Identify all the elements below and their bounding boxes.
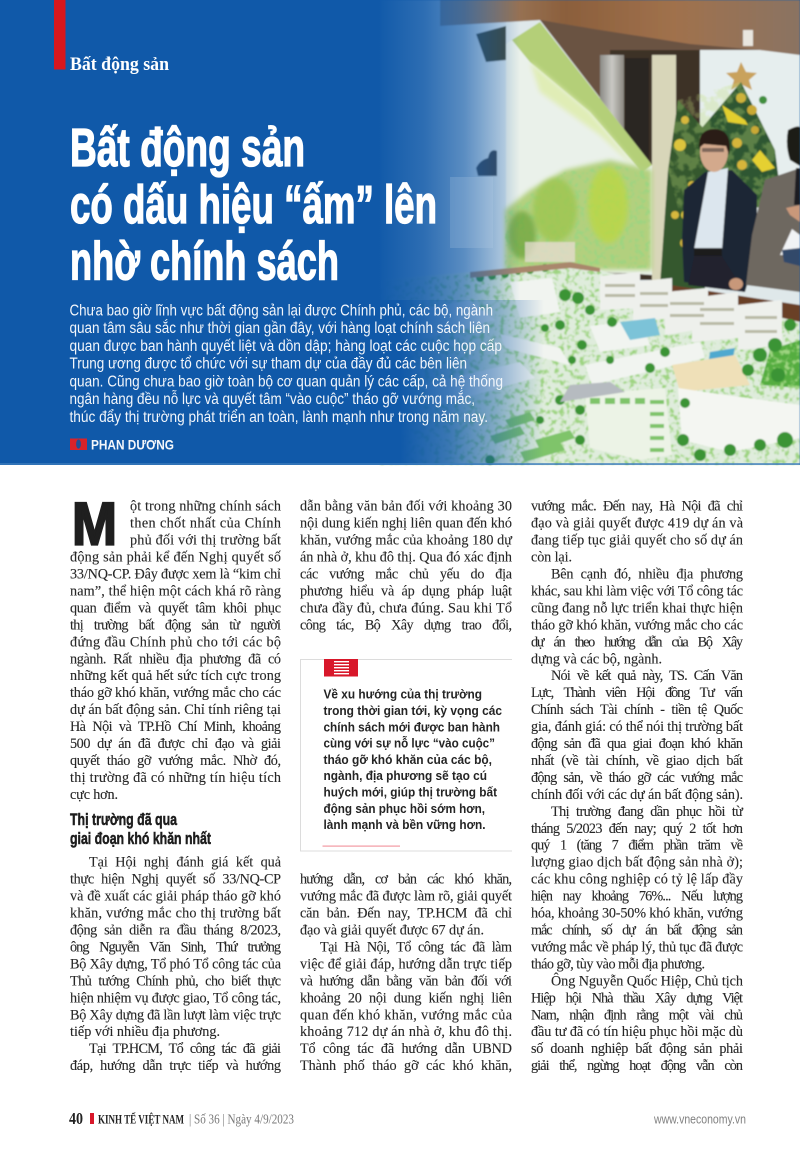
column 3 text: khác, sau khi làm việc với Tổ công tác (531, 584, 743, 600)
column 3 text: đầu tư đã có tín hiệu phục hồi mặc dù (531, 1024, 743, 1040)
subheading: Thị trường đã qua (70, 810, 177, 829)
quote text: cùng với sự nỗ lực “vào cuộc” (324, 736, 495, 751)
box border (300, 660, 512, 851)
column 1 second section text: Thủ tướng Chính phủ, cho biết thực (70, 973, 281, 989)
column 3 text: Thị trường đang dần phục hồi từ (551, 804, 744, 820)
column 3 text: động sản đã qua giai đoạn khó khăn (531, 736, 743, 752)
red marker (90, 1113, 94, 1124)
main title: nhờ chính sách (70, 232, 339, 292)
column 2 lower text: Tại Hà Nội, Tổ công tác đã làm (320, 940, 512, 956)
column 1 second section text: đáp, hướng dẫn trực tiếp và hướng (70, 1058, 281, 1074)
column 2 upper text: nội dung kiến nghị liên quan đến khó (300, 516, 512, 532)
column 1 opening paragraph: quan điểm và quyết tâm khôi phục (70, 600, 281, 616)
intro text: quan được ban hành quyết liệt và dồn dập; hàng loạt các cuộc họp cấp (70, 338, 502, 355)
column 1 second section text: Bộ Xây dựng đã lần lượt làm việc trực (70, 1007, 281, 1023)
intro text (70, 302, 503, 426)
column 2 lower text: khoảng 20 nội dung kiến nghị liên (300, 990, 512, 1006)
subheading (70, 810, 211, 848)
column 2 upper text: các vướng mắc chủ yếu do địa (300, 566, 513, 582)
quote text: ngành, địa phương sẽ tạo cú (324, 769, 487, 783)
column 2 upper text: chưa đầy đủ, chưa đúng. Sau khi Tổ (300, 600, 512, 616)
residential towers (600, 272, 782, 350)
column 1 second section text: khăn, vướng mắc cho thị trường bất (70, 906, 281, 922)
column 2 upper text: khăn, vướng mắc của khoảng 180 dự (300, 533, 513, 549)
column 1 second section text: ông Nguyễn Văn Sinh, Thứ trưởng (70, 940, 281, 956)
column 1 second section text: Bộ Xây dựng, Tổ phó Tổ công tác của (70, 956, 282, 972)
column 3 text: vướng mắc. Đến nay, Hà Nội đã chỉ (531, 499, 743, 515)
blue gradient overlay lower (0, 300, 800, 465)
column 2 upper text (300, 499, 513, 633)
main title: có dấu hiệu “ấm” lên (70, 175, 437, 235)
icon: author mark (70, 438, 87, 450)
villa complex (672, 355, 750, 392)
pull quote box (300, 659, 512, 851)
intro text: Trung ương được tổ chức với sự tham dự của đầy đủ các bên liên (70, 356, 467, 373)
pink rule (322, 846, 400, 847)
column 3 text: tháo gỡ khó khăn, vướng mắc cho các (531, 617, 743, 633)
column 1 opening paragraph: phủ đối với thị trường bất (130, 533, 281, 549)
column 1 opening paragraph (70, 499, 281, 803)
column 3 text: Bên cạnh đó, nhiều địa phương (551, 566, 743, 582)
photo: real estate model viewing (380, 0, 800, 465)
man in grey jacket (746, 126, 800, 292)
section label: Bất động sản (70, 54, 169, 75)
column 1 second section text: và đề xuất các giải pháp tháo gỡ khó (70, 889, 281, 905)
mural wall (506, 22, 652, 275)
column 3 text: cũng đang nỗ lực triển khai thực hiện (531, 600, 743, 616)
column 3 text: còn lại. (531, 550, 572, 566)
column 3 text: hiện nay khoảng 76%... Nếu lượng (531, 889, 743, 905)
column 1 opening paragraph: tháo gỡ khó khăn, vướng mắc cho các (70, 685, 281, 701)
column 1 opening paragraph: đứng đầu Chính phủ cho tới các bộ (70, 634, 281, 650)
column 1 opening paragraph: 500 dự án đã được chỉ đạo và giải (70, 736, 281, 752)
column 3 text: gia, đánh giá: có thể nói thị trường bất (531, 719, 743, 735)
column 3 text: lượng giao dịch bất động sản nhà ở); (531, 855, 743, 871)
column 2 lower text: quan đến khó khăn, vướng mắc của (300, 1007, 513, 1023)
quote text: trong thời gian tới, kỳ vọng các (324, 704, 502, 718)
column 1 opening paragraph: thị trường bất động sản từ người (70, 617, 281, 633)
column 2 upper text: dẫn bằng văn bản đối với khoảng 30 (300, 499, 512, 515)
pale panel in photo (450, 177, 493, 248)
column 1 second section text: thực hiện Nghị quyết số 33/NQ-CP (70, 872, 281, 888)
website: www.vneconomy.vn (653, 1112, 746, 1126)
column 1 opening paragraph: Hà Nội và TP.Hồ Chí Minh, khoảng (70, 719, 281, 735)
column 3 text: Ông Nguyễn Quốc Hiệp, Chủ tịch (551, 972, 743, 989)
column 2 lower text: việc để giải đáp, hướng dẫn trực tiếp (300, 956, 512, 972)
column 2 lower text (300, 872, 513, 1074)
red tab (54, 0, 66, 70)
column 3 text: số doanh nghiệp bất động sản phải (531, 1041, 743, 1057)
model road (560, 382, 625, 402)
quote text: động sản phục hồi sớm hơn, (324, 802, 485, 816)
column 3 text: Nam, nhận định rằng một vài chủ (531, 1007, 743, 1023)
subheading: giai đoạn khó khăn nhất (70, 829, 211, 848)
page footer (69, 1109, 746, 1128)
quote text: chính sách mới được ban hành (324, 720, 500, 734)
column 3 text: Nói về kết quả này, TS. Cấn Văn (551, 668, 743, 684)
column 1 second section text: Tại Hội nghị đánh giá kết quả (89, 855, 282, 871)
table edge (670, 285, 800, 322)
architectural model (380, 264, 800, 465)
column 3 text: dự án theo hướng dẫn của Bộ Xây (531, 634, 744, 650)
column 2 lower text: và hướng dẫn bằng văn bản đối với (300, 973, 512, 989)
column 1 opening paragraph: những kết quả hết sức tích cực trong (70, 668, 281, 684)
column 3 text: hóa, khoảng 30-50% khó khăn, vướng (531, 906, 743, 922)
column 2 lower text: vướng mắc đã được làm rõ, giải quyết (300, 889, 512, 905)
column 3 text: mắc chính, số dự án bất động sản (531, 922, 743, 938)
column 3 text: tháng 5/2023 đến nay; quý 2 tốt hơn (531, 821, 743, 837)
column 1 opening paragraph: ngành. Rất nhiều địa phương đã có (70, 651, 281, 667)
low rise rows (400, 278, 705, 405)
column 2 upper text: công tác, Bộ Xây dựng trao đổi, (300, 617, 512, 633)
column 2 upper text: án nhà ở, khu đô thị. Qua đó xác định (300, 550, 512, 566)
quote text: Về xu hướng của thị trường (324, 688, 482, 702)
header panel: blue banner with photo (0, 0, 800, 465)
banner bottom edge (0, 463, 800, 465)
back office figures (476, 150, 497, 176)
column 3 text: Lực, Thành viên Hội đồng Tư vấn (531, 685, 743, 701)
quote text: tháo gỡ khó khăn của các bộ, (324, 753, 492, 767)
model trees (476, 264, 796, 465)
column 2 lower text: Tổ công tác đã hướng dẫn UBND (300, 1041, 512, 1057)
column 2 lower text: Thành phố tháo gỡ các khó khăn, (300, 1058, 512, 1074)
intro text: thúc đẩy thị trường phát triển an toàn, lành mạnh như trong năm nay. (70, 409, 488, 426)
swimming pools (620, 318, 660, 340)
intro text: quan tâm sâu sắc như thời gian gần đây, với hàng loạt chính sách liên (70, 320, 490, 337)
glass frame detail (470, 262, 600, 278)
column 1 opening paragraph: 33/NQ-CP. Đây được xem là “kim chỉ (70, 566, 281, 582)
quote text: huých mới, giúp thị trường bất (324, 786, 498, 800)
column 1 second section text: tiếp với nhiều địa phương. (70, 1024, 220, 1040)
column 1 opening paragraph: ột trong những chính sách (130, 499, 281, 515)
main title: Bất động sản (70, 118, 305, 178)
column 2 lower text: đạo và giải quyết được 67 dự án. (300, 922, 484, 938)
intro text: quan. Cũng chưa bao giờ toàn bộ cơ quan quản lý các cấp, cả hệ thống (70, 374, 503, 390)
magazine name: KINH TẾ VIỆT NAM (98, 1112, 184, 1126)
column 3 text: Chính sách Tài chính - tiền tệ Quốc (531, 702, 743, 718)
intro text: ngân hàng đều nỗ lực và quyết tâm “vào cuộc” tháo gỡ vướng mắc, (70, 391, 475, 408)
icon: red text mark (324, 659, 358, 676)
large white building (678, 388, 800, 452)
column 1 second section text (70, 855, 282, 1074)
main title (70, 118, 437, 292)
column 3 text: đang tiếp tục giải quyết cho số dự án (531, 533, 743, 549)
banner base colour (0, 0, 800, 465)
column 3 text: động sản, về tháo gỡ các vướng mắc (531, 770, 743, 786)
column 3 text: tháo gỡ, tùy vào mỗi địa phương. (531, 956, 705, 972)
column 3 text (531, 499, 744, 1074)
quote text: lành mạnh và bền vững hơn. (324, 818, 486, 832)
column 3 text: các khu công nghiệp có tỷ lệ lấp đầy (531, 872, 744, 888)
column 2 lower text: căn bản. Đến nay, TP.HCM đã chỉ (300, 906, 512, 922)
column 3 text: nhất (về tài chính, về giao dịch bất (531, 753, 743, 769)
quote text (324, 688, 502, 832)
column 1 opening paragraph: cực hơn. (70, 787, 118, 803)
column 1 opening paragraph: nam”, thể hiện một cách khá rõ ràng (70, 584, 281, 600)
column 2 upper text: phương hiểu và áp dụng pháp luật (300, 584, 512, 600)
column 2 lower text: khoảng 712 dự án nhà ở, khu đô thị. (300, 1024, 512, 1040)
intro text: Chưa bao giờ lĩnh vực bất động sản lại được Chính phủ, các bộ, ngành (70, 302, 493, 320)
christmas trees (660, 62, 782, 290)
column 3 text: vướng mắc về pháp lý, thủ tục đã được (531, 940, 743, 956)
column 1 second section text: động sản diễn ra đầu tháng 8/2023, (70, 922, 281, 938)
drop cap: M (72, 490, 117, 558)
column 3 text: Hiệp hội Nhà thầu Xây dựng Việt (531, 990, 743, 1006)
byline: PHAN DƯƠNG (91, 438, 174, 452)
blue gradient overlay (0, 0, 800, 300)
lower villa rows (585, 388, 672, 460)
plants (505, 160, 652, 270)
column 3 text: giải thể, ngừng hoạt động vẫn còn (531, 1058, 743, 1074)
column 1 opening paragraph: quyết tháo gỡ vướng mắc. Nhờ đó, (70, 753, 281, 769)
column 2 lower text: hướng dẫn, cơ bản các khó khăn, (300, 872, 512, 888)
column 3 text: dựng và các bộ, ngành. (531, 651, 662, 667)
model base (380, 262, 800, 465)
page number: 40 (69, 1109, 83, 1128)
issue details: | Số 36 | Ngày 4/9/2023 (189, 1112, 294, 1126)
column 3 text: quý 1 (tăng 7 điểm phần trăm về (531, 838, 743, 854)
column 1 opening paragraph: động sản phải kể đến Nghị quyết số (70, 550, 281, 566)
man in navy suit (682, 129, 757, 292)
column 1 second section text: Tại TP.HCM, Tổ công tác đã giải (89, 1041, 281, 1057)
column 1 opening paragraph: then chốt nhất của Chính (130, 516, 281, 532)
ceiling (440, 0, 800, 55)
column 1 second section text: hiện nhiệm vụ được giao, Tổ công tác, (70, 990, 281, 1006)
column 3 text: chính đối với các dự án bất động sản). (531, 787, 743, 803)
column 3 text: đạo và giải quyết được 419 dự án và (531, 516, 744, 532)
column 1 opening paragraph: dự án bất động sản. Chỉ tính riêng tại (70, 702, 281, 718)
column 1 opening paragraph: thị trường đã có những tín hiệu tích (70, 770, 281, 786)
